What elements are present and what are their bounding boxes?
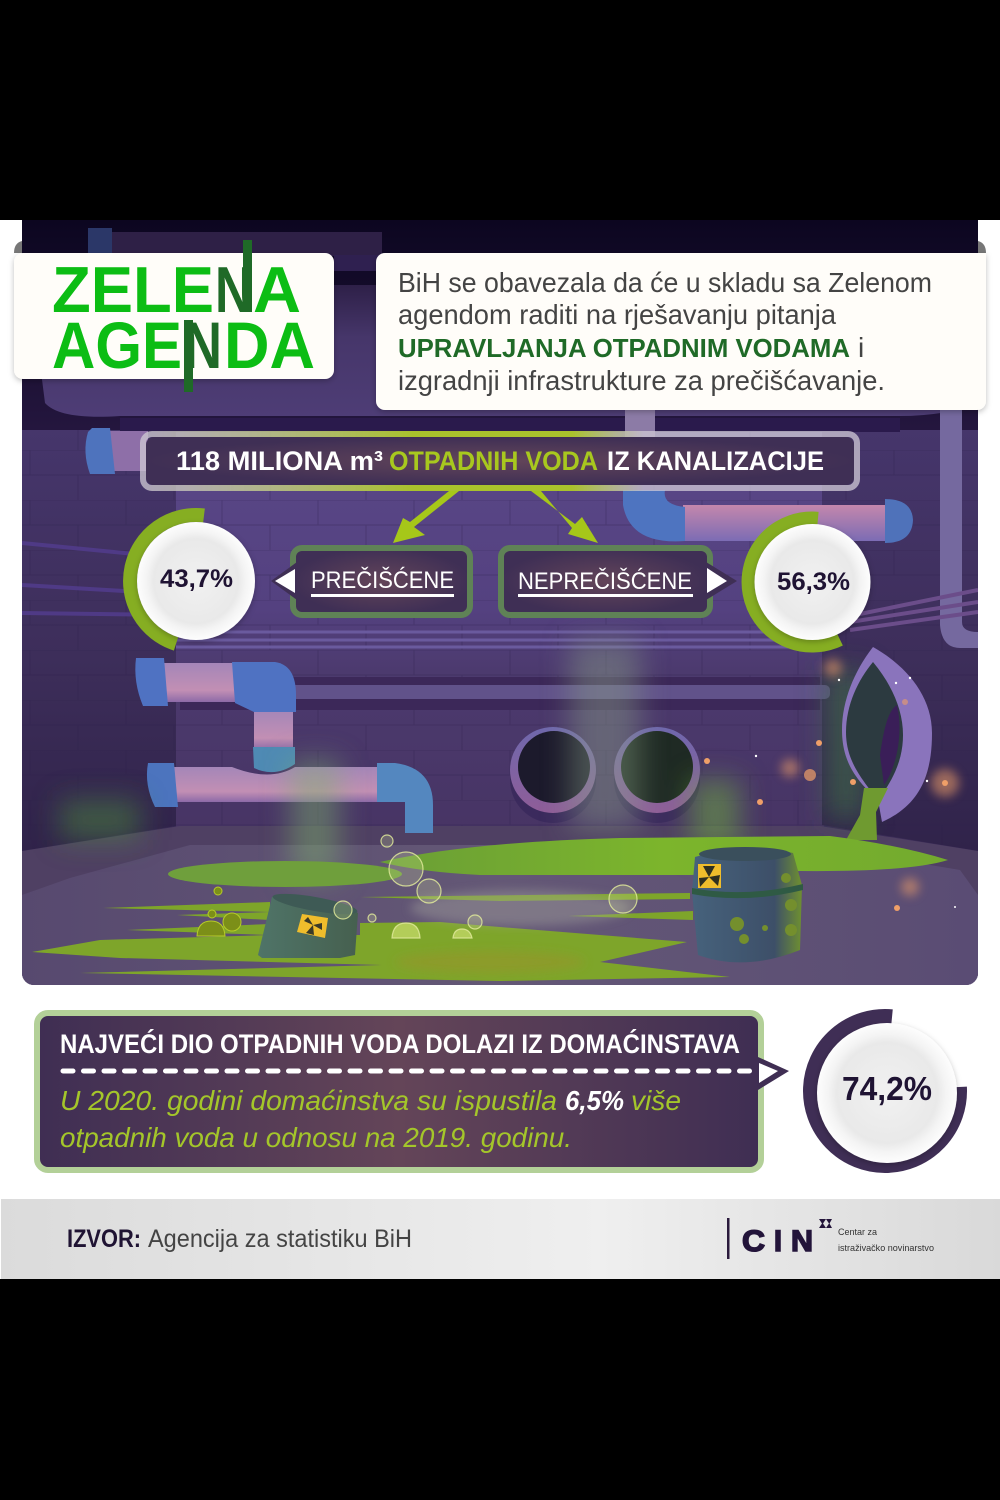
logo word AGENDA: N — [184, 308, 222, 382]
arrow head white — [759, 1063, 778, 1083]
panel: treated label — [271, 548, 470, 615]
bubbles — [334, 835, 637, 938]
broken wall opening pipe — [842, 647, 932, 822]
grey card edge right — [978, 241, 986, 253]
panel: untreated label — [501, 548, 737, 615]
black top bar — [0, 0, 1000, 220]
arrow to untreated — [531, 491, 598, 543]
dashed divider — [63, 1068, 760, 1074]
wall pipe bands — [180, 677, 830, 710]
pointer right — [706, 562, 737, 600]
grey card edge left — [14, 241, 22, 253]
CIN logo: Centar za — [838, 1227, 878, 1238]
sewer outlet holes — [510, 727, 700, 823]
banner text: 118 MILIONA m³ — [176, 446, 383, 476]
logo word ZELENA: A — [253, 253, 301, 326]
white page — [0, 220, 1000, 1279]
donut 56,3%: 56,3% — [777, 568, 850, 596]
dark slime bubbles — [197, 887, 241, 936]
label text: PREČIŠĆENE — [311, 566, 454, 594]
ceiling pipes — [30, 228, 985, 648]
CIN logo — [727, 1218, 934, 1259]
wall conduits — [22, 543, 978, 647]
panel: logo card — [14, 240, 334, 392]
ceiling — [22, 220, 978, 430]
footer bar — [1, 1199, 1000, 1279]
logo word AGENDA: AGE — [52, 308, 182, 382]
logo word ZELENA — [52, 240, 301, 326]
logo word AGENDA — [52, 308, 315, 392]
upper right pipe — [623, 490, 913, 543]
donut 74,2% — [811, 1017, 959, 1165]
white arrow right — [707, 568, 727, 593]
intro paragraph — [398, 267, 932, 396]
large barrel — [692, 847, 803, 962]
green fumes — [60, 640, 866, 880]
logo word ZELENA: ZELE — [52, 253, 214, 326]
panel: total wastewater banner — [143, 434, 857, 488]
donut 74,2%: 74,2% — [842, 1070, 932, 1107]
arrow head outline — [758, 1057, 789, 1090]
icon: CIN mark — [819, 1219, 832, 1228]
callout text — [60, 1085, 681, 1153]
logo word ZELENA: N — [215, 253, 252, 326]
callout text: otpadnih voda u odnosu na 2019. godinu. — [60, 1122, 572, 1153]
panel: households callout — [37, 1013, 789, 1170]
right wall — [822, 420, 978, 851]
CIN logo: istraživačko novinarstvo — [838, 1243, 934, 1254]
donut 56,3% — [748, 518, 870, 646]
banner text: OTPADNIH VODA — [389, 446, 598, 476]
intro paragraph: BiH se obavezala da će u skladu sa Zelenom — [398, 267, 932, 298]
back wall — [176, 420, 824, 840]
left lower pipe with elbow — [147, 763, 433, 833]
orange glowing sparks — [704, 659, 959, 911]
white arrow left — [275, 569, 295, 593]
tilted barrel — [258, 890, 359, 958]
arrow to treated — [393, 491, 459, 543]
intro paragraph: agendom raditi na rješavanju pitanja — [398, 299, 836, 330]
intro paragraph: izgradnji infrastrukture za prečišćavanje. — [398, 365, 885, 396]
top left pipe — [85, 428, 148, 474]
CIN logo: I — [774, 1225, 782, 1258]
pointer left — [271, 562, 297, 600]
donut 43,7% — [130, 515, 255, 644]
callout text: više — [631, 1085, 681, 1116]
logo word AGENDA: DA — [224, 308, 315, 382]
callout heading: NAJVEĆI DIO OTPADNIH VODA DOLAZI IZ DOMAĆINSTAVA — [60, 1028, 740, 1059]
intro paragraph: UPRAVLJANJA OTPADNIM VODAMA — [398, 333, 850, 363]
sewer scene illustration — [22, 220, 985, 990]
banner text: IZ KANALIZACIJE — [607, 446, 824, 476]
label text: NEPREČIŠĆENE — [518, 567, 692, 595]
CIN logo: C — [742, 1225, 765, 1258]
panel: intro text card — [376, 253, 986, 410]
floor slime streaks — [32, 890, 730, 981]
left wall — [22, 420, 176, 851]
intro paragraph: i — [858, 332, 864, 363]
right slime pool — [380, 836, 948, 875]
slime pour — [846, 788, 888, 840]
banner text — [176, 446, 824, 476]
left upper pipe with elbow — [135, 658, 296, 772]
white sparks — [755, 677, 956, 908]
donut 43,7%: 43,7% — [160, 565, 233, 593]
source text: IZVOR: — [67, 1225, 141, 1253]
callout text: 6,5% — [565, 1085, 624, 1116]
floor — [22, 826, 978, 985]
CIN logo: N — [791, 1225, 813, 1258]
callout text: U 2020. godini domaćinstva su ispustila — [60, 1085, 557, 1116]
left slime pool — [168, 861, 402, 887]
source text: Agencija za statistiku BiH — [148, 1225, 412, 1253]
black bottom bar — [0, 1279, 1000, 1500]
